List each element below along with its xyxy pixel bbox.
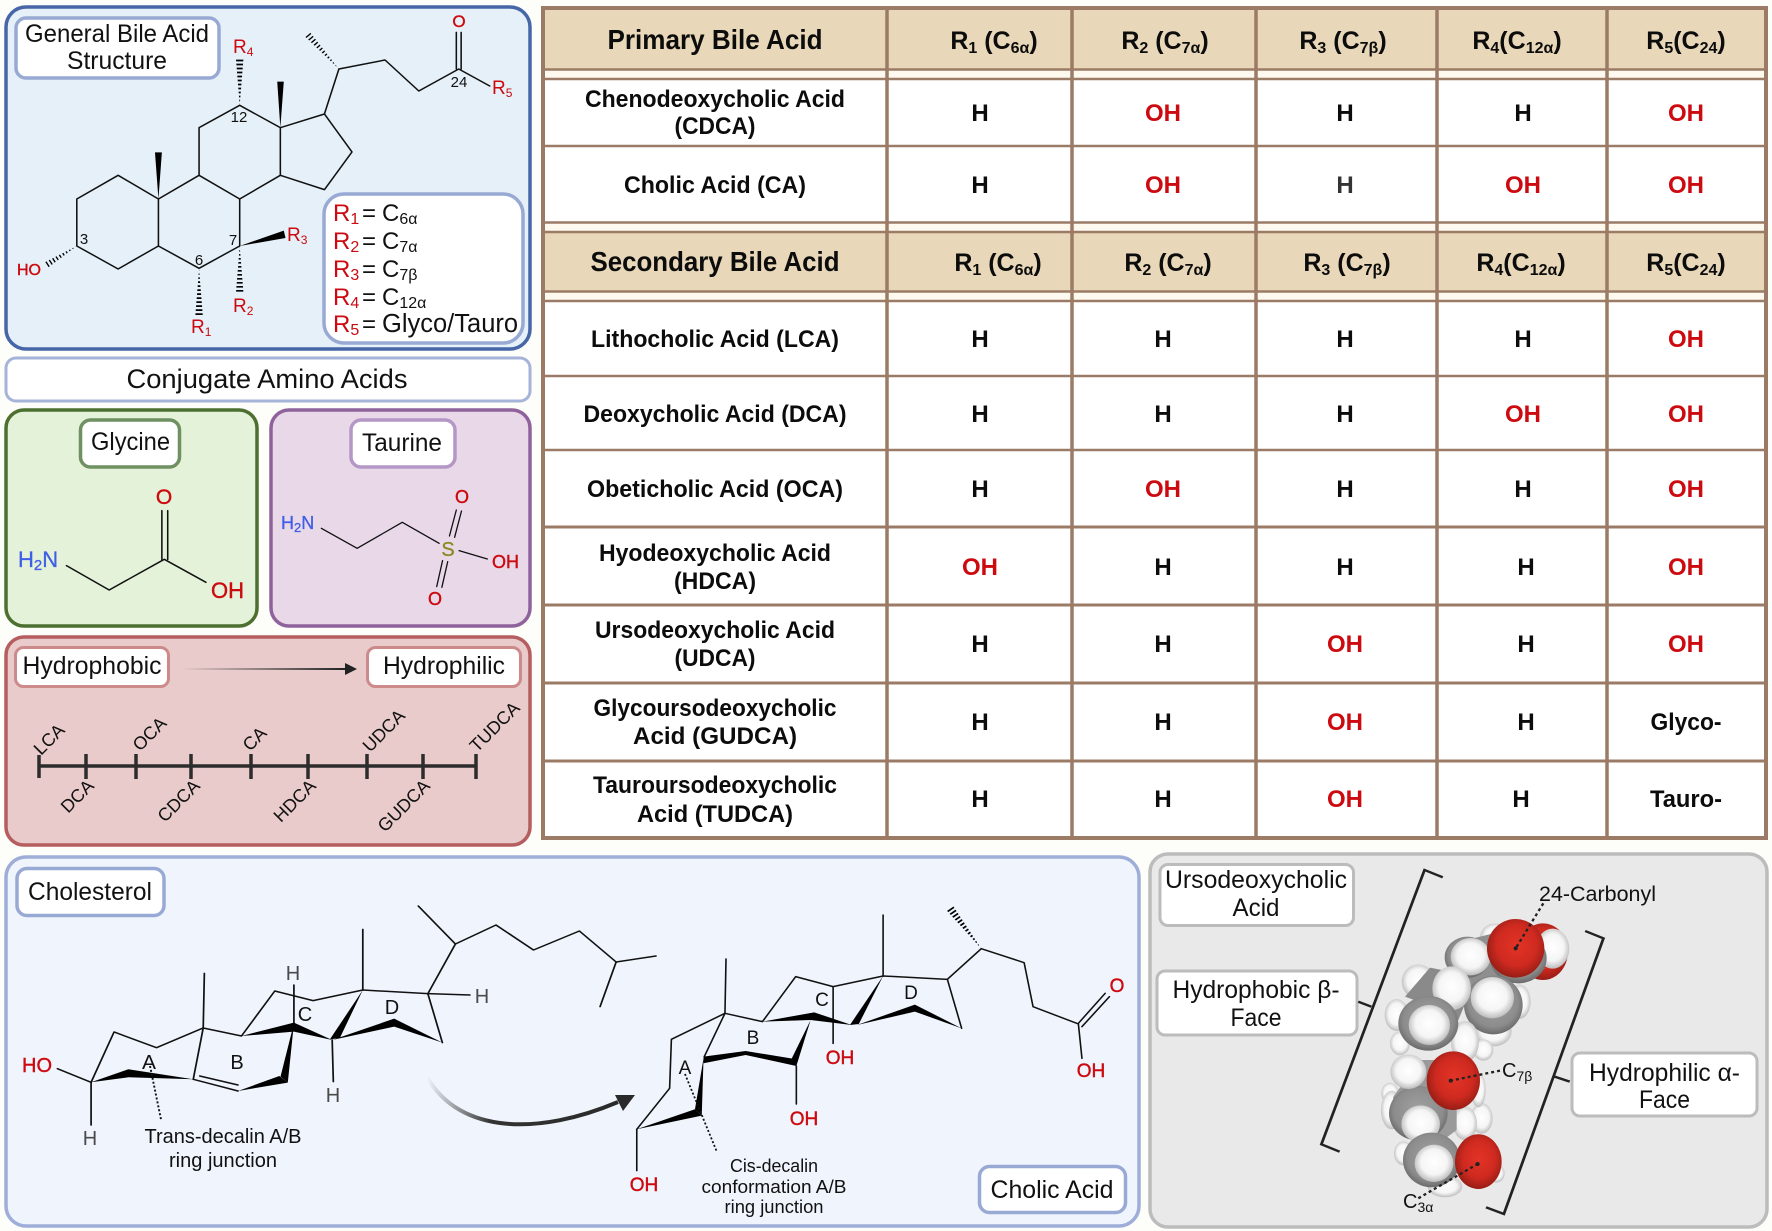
- chemical structure: cholesterol: H: [475, 986, 489, 1008]
- chemical structure: cholic acid: OH: [826, 1048, 854, 1069]
- R group key: 7α: [399, 239, 418, 256]
- row: CA: OH: [1668, 172, 1704, 199]
- chemical structure: taurine: [281, 487, 519, 609]
- chemical structure: taurine: O: [428, 589, 442, 609]
- panel: cholesterol to cholic acid: [6, 857, 1139, 1226]
- heading row: primary bile acid: R: [1299, 27, 1317, 55]
- R group key: R: [333, 284, 350, 311]
- heading row: secondary bile acid: 5: [1664, 262, 1673, 279]
- heading row: secondary bile acid: 12α: [1530, 262, 1557, 279]
- row: HDCA: Hyodeoxycholic Acid: [599, 540, 831, 567]
- heading row: secondary bile acid: (C: [1330, 249, 1364, 277]
- heading row: secondary bile acid: R: [1476, 249, 1494, 277]
- row: CA: OH: [1505, 172, 1541, 199]
- row: TUDCA: H: [1154, 786, 1172, 813]
- label: Hydrophobic beta face: Face: [1230, 1004, 1282, 1032]
- row: HDCA: H: [1336, 554, 1354, 581]
- row: HDCA: OH: [962, 554, 998, 581]
- heading row: primary bile acid: 4: [1490, 40, 1499, 57]
- atom labels: 7: [229, 232, 237, 249]
- chemical structure: cholic acid: OH: [1077, 1061, 1105, 1082]
- heading row: primary bile acid: 6α: [1011, 40, 1030, 57]
- atom labels: R: [492, 78, 506, 99]
- axis: bile acid ranking: [30, 698, 524, 836]
- row: LCA: OH: [1668, 326, 1704, 353]
- axis: bile acid ranking: HDCA: [270, 776, 320, 826]
- panel: glycine: [6, 410, 257, 626]
- bracket: beta face: [1321, 870, 1443, 1152]
- heading row: secondary bile acid: 7β: [1364, 262, 1383, 279]
- chemical structure: cholesterol: D: [385, 997, 399, 1019]
- heading row: primary bile acid: 24: [1700, 40, 1718, 57]
- heading row: primary bile acid: 2: [1139, 40, 1148, 57]
- chemical structure: glycine: OH: [211, 578, 244, 603]
- heading row: secondary bile acid: (C: [981, 249, 1015, 277]
- row: HDCA: OH: [1668, 554, 1704, 581]
- R group key: 7β: [399, 267, 417, 284]
- label: Cholic Acid: [980, 1166, 1126, 1212]
- panel: taurine: [271, 410, 530, 626]
- heading row: primary bile acid: ): [1029, 27, 1038, 55]
- chemical structure: taurine: S: [441, 539, 455, 561]
- row: HDCA: (HDCA): [674, 568, 756, 595]
- atom labels: R: [233, 296, 247, 317]
- row: UDCA: [595, 617, 1704, 672]
- molecule: space-filling spheres: [1381, 903, 1569, 1198]
- chemical structure: taurine: 2: [294, 520, 301, 535]
- annotation: C3 alpha: 3α: [1417, 1199, 1433, 1215]
- header fills and gap rows: [543, 8, 1766, 301]
- label: Hydrophilic alpha face: Face: [1639, 1086, 1690, 1114]
- row: DCA: Deoxycholic Acid (DCA): [584, 401, 846, 428]
- row: CDCA: OH: [1668, 100, 1704, 127]
- table: bile acid substituents: [543, 8, 1766, 838]
- atom labels: [17, 12, 513, 339]
- row: OCA: H: [1336, 476, 1354, 503]
- heading row: primary bile acid: R: [1472, 27, 1490, 55]
- row: OCA: OH: [1145, 476, 1181, 503]
- row: HDCA: H: [1517, 554, 1535, 581]
- heading row: secondary bile acid: Secondary Bile Acid: [590, 246, 840, 277]
- row: UDCA: OH: [1327, 631, 1363, 658]
- chemical structure: glycine: H: [18, 547, 34, 572]
- row: HDCA: [599, 540, 1704, 595]
- row: CDCA: Chenodeoxycholic Acid: [585, 86, 845, 113]
- R group key: R: [333, 311, 350, 338]
- atom labels: 1: [205, 325, 212, 339]
- R group key: 5: [350, 322, 359, 339]
- R group key: R: [333, 200, 350, 227]
- R group key: Glyco/Tauro: [382, 310, 518, 338]
- row: LCA: H: [971, 326, 989, 353]
- callout: trans-decalin: Trans-decalin A/B: [144, 1126, 302, 1148]
- callout: trans-decalin: ring junction: [169, 1150, 277, 1172]
- heading row: primary bile acid: R: [950, 27, 968, 55]
- callout: cis-decalin: [702, 1156, 846, 1217]
- callout: trans-decalin: [144, 1126, 302, 1172]
- heading row: secondary bile acid: R: [954, 249, 972, 277]
- row: GUDCA: H: [1154, 709, 1172, 736]
- label: General Bile Acid Structure: [16, 18, 219, 78]
- R group key: 2: [350, 239, 359, 256]
- heading row: secondary bile acid: R: [1124, 249, 1142, 277]
- chemical structure: cholic acid: OH: [790, 1109, 818, 1130]
- label: Glycine: Glycine: [91, 428, 170, 456]
- R group key: =: [362, 284, 376, 311]
- heading row: secondary bile acid: 2: [1142, 262, 1151, 279]
- label: Cholesterol: Cholesterol: [28, 878, 152, 906]
- chemical structure: cholic acid: C: [815, 990, 829, 1011]
- heading row: primary bile acid: 12α: [1526, 40, 1553, 57]
- chemical structure: cholic acid: O: [1110, 976, 1124, 997]
- atom labels: R: [191, 317, 205, 338]
- heading row: secondary bile acid: 4: [1494, 262, 1503, 279]
- chemical structure: cholic acid: D: [904, 983, 918, 1004]
- label: Taurine: [351, 420, 455, 467]
- heading row: primary bile acid: 7α: [1182, 40, 1201, 57]
- heading row: primary bile acid: 7β: [1360, 40, 1379, 57]
- heading row: secondary bile acid: ): [1203, 249, 1212, 277]
- arrow: hydrophobic to hydrophilic: [181, 663, 357, 675]
- label: Hydrophobic beta face: Hydrophobic β-: [1172, 976, 1340, 1004]
- label: Ursodeoxycholic Acid: Acid: [1232, 894, 1280, 922]
- row: CA: [624, 172, 1704, 199]
- R group key: 1: [350, 211, 359, 228]
- panel: general bile acid structure: [6, 7, 530, 349]
- chemical structure: cholic acid: OH: [630, 1175, 658, 1196]
- chemical structure: cholesterol: [22, 906, 656, 1150]
- chemical structure: glycine: [18, 486, 244, 603]
- R group key: 4: [350, 295, 359, 312]
- heading row: primary bile acid: R: [1121, 27, 1139, 55]
- chemical structure: cholic acid: [630, 907, 1124, 1196]
- row: OCA: [587, 476, 1704, 503]
- bracket: alpha face: [1486, 931, 1603, 1214]
- callout: cis-decalin: Cis-decalin: [730, 1156, 818, 1176]
- row: GUDCA: H: [1517, 709, 1535, 736]
- R group key: 3: [350, 267, 359, 284]
- row: CA: OH: [1145, 172, 1181, 199]
- row: DCA: H: [971, 401, 989, 428]
- chemical structure: cholesterol: C: [298, 1004, 312, 1026]
- heading row: primary bile acid: Primary Bile Acid: [608, 24, 822, 55]
- chemical structure: taurine: O: [455, 487, 469, 507]
- R group key: C: [382, 256, 399, 283]
- row: UDCA: H: [1154, 631, 1172, 658]
- heading row: secondary bile acid: ): [1033, 249, 1042, 277]
- atom labels: 24: [451, 74, 467, 91]
- annotation: C3 alpha: C: [1403, 1191, 1417, 1213]
- row: GUDCA: H: [971, 709, 989, 736]
- chemical structure: glycine: O: [156, 486, 172, 509]
- chemical structure: glycine: 2: [34, 557, 42, 574]
- heading row: secondary bile acid: 3: [1321, 262, 1330, 279]
- row: CDCA: OH: [1145, 100, 1181, 127]
- R group key: =: [362, 311, 376, 338]
- heading row: secondary bile acid: R: [1303, 249, 1321, 277]
- heading row: primary bile acid: 1: [968, 40, 977, 57]
- row: CA: Cholic Acid (CA): [624, 172, 806, 199]
- label: Hydrophilic: [368, 648, 520, 686]
- row: OCA: OH: [1668, 476, 1704, 503]
- row: CDCA: H: [1336, 100, 1354, 127]
- row: LCA: H: [1336, 326, 1354, 353]
- chemical structure: cholic acid: B: [747, 1028, 759, 1049]
- atom labels: 2: [247, 304, 254, 318]
- row: UDCA: Ursodeoxycholic Acid: [595, 617, 835, 644]
- row: CDCA: (CDCA): [674, 113, 756, 140]
- panel: ursodeoxycholic acid space-filling model: [1150, 854, 1767, 1227]
- row: OCA: Obeticholic Acid (OCA): [587, 476, 843, 503]
- row: GUDCA: Glycoursodeoxycholic: [594, 695, 836, 722]
- row: LCA: H: [1154, 326, 1172, 353]
- label: Hydrophilic alpha face: [1572, 1053, 1757, 1116]
- label: Hydrophilic alpha face: Hydrophilic α-: [1589, 1059, 1740, 1087]
- row: LCA: H: [1514, 326, 1532, 353]
- heading row: primary bile acid: R: [1646, 27, 1664, 55]
- heading row: secondary bile acid: 6α: [1015, 262, 1034, 279]
- R group key: [324, 194, 523, 343]
- axis: bile acid ranking: TUDCA: [466, 698, 524, 756]
- row: GUDCA: Glyco-: [1650, 709, 1722, 736]
- label: Taurine: Taurine: [362, 429, 442, 457]
- label: Ursodeoxycholic Acid: [1160, 864, 1354, 926]
- row: HDCA: H: [1154, 554, 1172, 581]
- heading row: primary bile acid: (C: [977, 27, 1011, 55]
- label: Hydrophobic beta face: [1157, 971, 1357, 1035]
- atom labels: R: [233, 37, 247, 58]
- callout: cis-decalin: ring junction: [724, 1197, 824, 1217]
- chemical structure: cholesterol: A: [142, 1052, 157, 1074]
- R group key: C: [382, 228, 399, 255]
- chemical structure: cholic acid: A: [679, 1058, 692, 1079]
- chemical structure: cholesterol: H: [83, 1128, 97, 1150]
- row: CA: H: [971, 172, 989, 199]
- row: UDCA: OH: [1668, 631, 1704, 658]
- chemical structure: cholesterol: H: [286, 963, 300, 985]
- atom labels: 3: [80, 231, 88, 248]
- label: Cholesterol: [17, 868, 164, 916]
- heading row: secondary bile acid: 7α: [1185, 262, 1204, 279]
- heading row: primary bile acid: (C: [1326, 27, 1360, 55]
- chemical structure: glycine: N: [42, 547, 58, 572]
- R group key: C: [382, 284, 399, 311]
- callout: cis-decalin: conformation A/B: [702, 1177, 846, 1197]
- atom labels: 12: [231, 109, 247, 126]
- heading row: secondary bile acid: ): [1717, 249, 1726, 277]
- label: Hydrophobic: [16, 648, 168, 686]
- panel: hydrophobicity scale: [6, 637, 530, 845]
- row: DCA: H: [1336, 401, 1354, 428]
- row: CDCA: H: [971, 100, 989, 127]
- heading: Conjugate Amino Acids: Conjugate Amino Acids: [126, 364, 408, 394]
- atom labels: HO: [17, 262, 41, 279]
- row: CDCA: [585, 86, 1704, 140]
- heading row: secondary bile acid: (C: [1151, 249, 1185, 277]
- atom labels: R: [287, 225, 301, 246]
- R group key: =: [362, 256, 376, 283]
- row: UDCA: H: [971, 631, 989, 658]
- row: DCA: OH: [1505, 401, 1541, 428]
- row: UDCA: H: [1517, 631, 1535, 658]
- heading row: secondary bile acid: [590, 246, 1726, 279]
- heading row: primary bile acid: (C: [1673, 27, 1700, 55]
- chemical structure: cholesterol: B: [230, 1052, 244, 1074]
- axis: bile acid ranking: CDCA: [154, 776, 204, 826]
- heading row: primary bile acid: [608, 24, 1726, 57]
- R group key: 12α: [399, 295, 426, 312]
- R group key: R: [333, 228, 350, 255]
- R group key: =: [362, 200, 376, 227]
- heading: Conjugate Amino Acids: [6, 358, 530, 401]
- axis: bile acid ranking: LCA: [30, 720, 69, 759]
- annotation: 24-Carbonyl: 24-Carbonyl: [1539, 883, 1656, 906]
- heading row: primary bile acid: 3: [1317, 40, 1326, 57]
- axis: bile acid ranking: GUDCA: [374, 776, 434, 836]
- heading row: primary bile acid: ): [1200, 27, 1209, 55]
- row: DCA: H: [1154, 401, 1172, 428]
- row: TUDCA: Acid (TUDCA): [637, 801, 793, 828]
- R group key: =: [362, 228, 376, 255]
- annotation: C7 beta: 7β: [1516, 1068, 1532, 1084]
- row: OCA: H: [971, 476, 989, 503]
- heading row: secondary bile acid: (C: [1673, 249, 1700, 277]
- label: Glycine: [80, 420, 180, 467]
- atom labels: 5: [506, 86, 513, 100]
- row: TUDCA: H: [971, 786, 989, 813]
- row: LCA: [591, 326, 1704, 353]
- R group key: C: [382, 200, 399, 227]
- chemical structure: taurine: H: [281, 513, 294, 533]
- row: UDCA: (UDCA): [674, 645, 756, 672]
- heading row: primary bile acid: (C: [1148, 27, 1182, 55]
- R group key: 6α: [399, 211, 418, 228]
- heading row: secondary bile acid: 1: [972, 262, 981, 279]
- R group key: R: [333, 256, 350, 283]
- label: General Bile Acid Structure: Structure: [67, 47, 167, 75]
- row: TUDCA: Tauroursodeoxycholic: [593, 772, 837, 799]
- row: TUDCA: H: [1512, 786, 1530, 813]
- chemical structure: taurine: N: [301, 513, 314, 533]
- chemical structure: cholesterol: HO: [22, 1055, 52, 1077]
- row: TUDCA: OH: [1327, 786, 1363, 813]
- axis: bile acid ranking: DCA: [57, 776, 98, 817]
- atom labels: O: [452, 12, 466, 31]
- row: DCA: OH: [1668, 401, 1704, 428]
- row: CA: H: [1336, 172, 1354, 199]
- heading row: primary bile acid: 5: [1664, 40, 1673, 57]
- chemical structure: taurine: OH: [492, 552, 519, 572]
- row: LCA: Lithocholic Acid (LCA): [591, 326, 839, 353]
- atom labels: 3: [301, 233, 308, 247]
- label: Hydrophobic: Hydrophobic: [22, 652, 162, 680]
- arrow: cholesterol to cholic acid: [427, 1077, 635, 1124]
- heading row: secondary bile acid: ): [1382, 249, 1391, 277]
- row: GUDCA: [594, 695, 1722, 750]
- row: TUDCA: Tauro-: [1650, 786, 1722, 813]
- atom labels: 6: [195, 252, 203, 269]
- row: GUDCA: Acid (GUDCA): [633, 723, 797, 750]
- label: Cholic Acid: Cholic Acid: [990, 1176, 1114, 1204]
- annotation: C7 beta: C: [1502, 1060, 1516, 1082]
- chemical structure: cholesterol: H: [326, 1085, 340, 1107]
- label: Hydrophilic: Hydrophilic: [383, 652, 505, 680]
- row: TUDCA: [593, 772, 1722, 828]
- heading row: secondary bile acid: ): [1557, 249, 1566, 277]
- heading row: secondary bile acid: R: [1646, 249, 1664, 277]
- heading row: primary bile acid: (C: [1499, 27, 1526, 55]
- heading row: secondary bile acid: 24: [1700, 262, 1718, 279]
- heading row: secondary bile acid: (C: [1503, 249, 1530, 277]
- label: General Bile Acid Structure: General Bile Acid: [25, 20, 209, 48]
- row: DCA: [584, 401, 1704, 428]
- atom labels: 4: [247, 45, 254, 59]
- axis: bile acid ranking: OCA: [129, 713, 170, 755]
- heading row: primary bile acid: ): [1553, 27, 1562, 55]
- axis: bile acid ranking: UDCA: [359, 706, 409, 756]
- heading row: primary bile acid: ): [1378, 27, 1387, 55]
- row: OCA: H: [1514, 476, 1532, 503]
- chemical structure: bile acid skeleton: [45, 32, 490, 316]
- axis: bile acid ranking: CA: [239, 723, 271, 755]
- row: GUDCA: OH: [1327, 709, 1363, 736]
- label: Ursodeoxycholic Acid: Ursodeoxycholic: [1165, 866, 1347, 894]
- heading row: primary bile acid: ): [1717, 27, 1726, 55]
- row: CDCA: H: [1514, 100, 1532, 127]
